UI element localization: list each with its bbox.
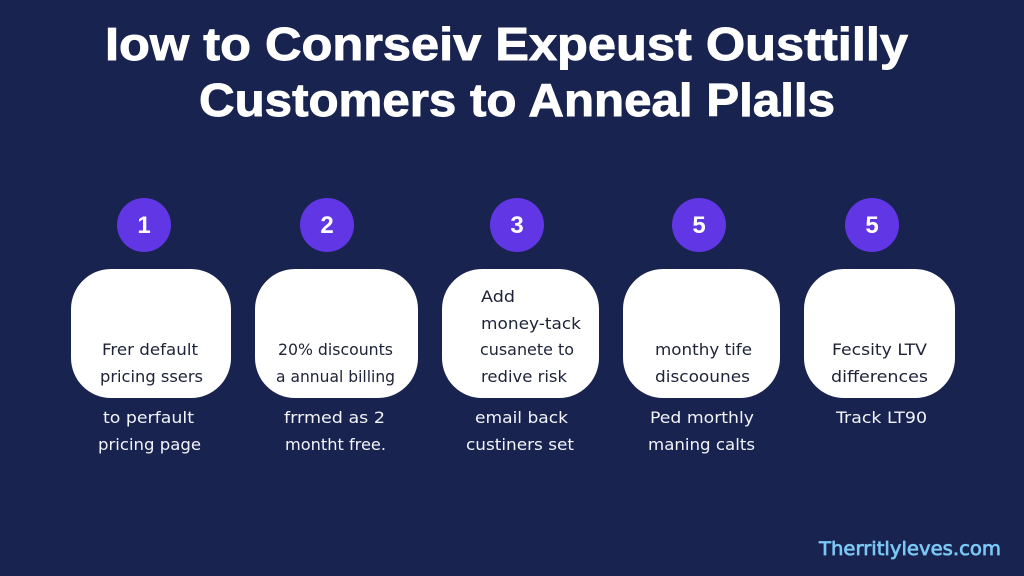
card 2: a annual billing	[276, 367, 395, 386]
number badge 3	[490, 198, 544, 252]
card 3: Add	[481, 287, 515, 306]
number badge 1: 1	[137, 212, 151, 239]
caption 4	[648, 408, 755, 454]
caption 1: to perfault	[103, 408, 194, 427]
card 3: money-tack	[481, 314, 582, 333]
title: Iow to Conrseiv Expeust Ousttilly	[105, 18, 908, 70]
card 1	[71, 269, 231, 398]
card 3: cusanete to	[480, 340, 574, 359]
caption 2: frrmed as 2	[284, 408, 385, 427]
step 4	[623, 198, 780, 454]
step 3	[442, 198, 599, 454]
card 2: 20% discounts	[278, 340, 393, 359]
card 5	[804, 269, 955, 398]
caption 1: pricing page	[98, 435, 201, 454]
card 4	[623, 269, 780, 398]
caption 1	[98, 408, 201, 454]
number badge 1	[117, 198, 171, 252]
number badge 5: 5	[865, 212, 879, 239]
card 1: pricing ssers	[100, 367, 203, 386]
card 2	[255, 269, 418, 398]
card 5: differences	[831, 367, 928, 386]
title	[105, 18, 908, 126]
number badge 2: 2	[320, 212, 334, 239]
caption 5: Track LT90	[835, 408, 927, 427]
caption 4: maning calts	[648, 435, 755, 454]
caption 4: Ped morthly	[650, 408, 754, 427]
caption 3: email back	[475, 408, 569, 427]
card 1: Frer default	[102, 340, 198, 359]
step 2	[255, 198, 418, 454]
card 3: redive risk	[481, 367, 568, 386]
number badge 4	[672, 198, 726, 252]
number badge 5	[845, 198, 899, 252]
number badge 4: 5	[692, 212, 706, 239]
card 4: monthy tife	[655, 340, 752, 359]
caption 2	[284, 408, 386, 454]
title: Customers to Anneal Plalls	[199, 74, 835, 126]
card 4: discoounes	[655, 367, 750, 386]
number badge 2	[300, 198, 354, 252]
step 1	[71, 198, 231, 454]
caption 3: custiners set	[466, 435, 574, 454]
card 3	[442, 269, 599, 398]
number badge 3: 3	[510, 212, 524, 239]
card 5: Fecsity LTV	[832, 340, 927, 359]
footer website: Therritlyleves.com	[818, 538, 1001, 560]
caption 2: montht free.	[285, 435, 386, 454]
caption 3	[466, 408, 574, 454]
step 5	[804, 198, 955, 427]
